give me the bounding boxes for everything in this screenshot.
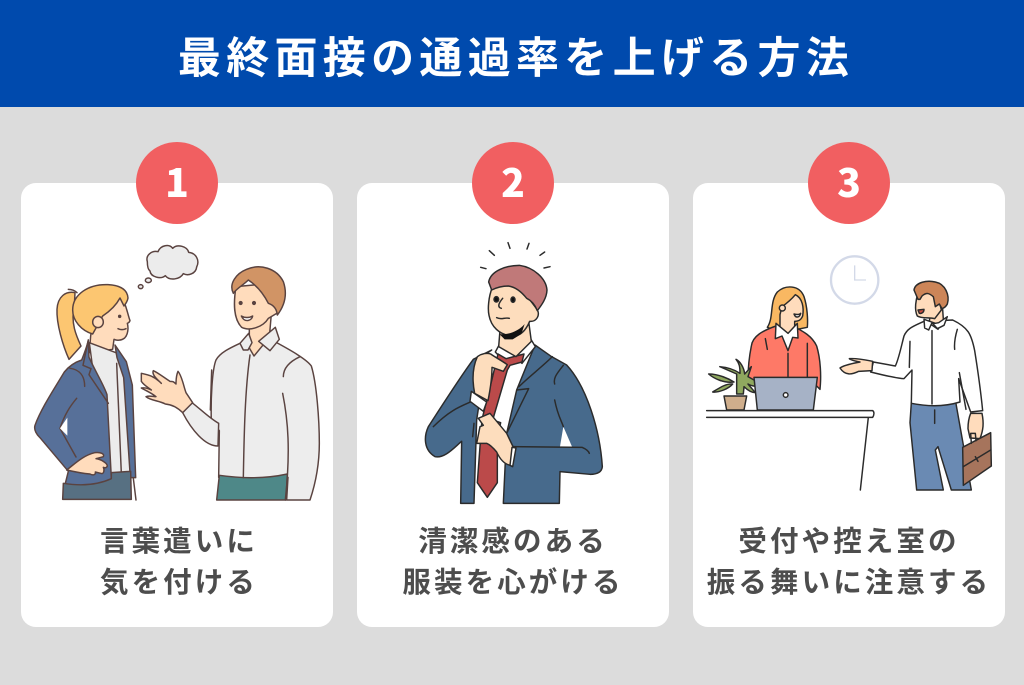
label 3: 受付や控え室の [738,526,960,558]
plant [709,359,765,410]
panel: step 1 [21,142,333,627]
laptop [754,377,817,410]
illustration: two people talking [35,246,319,500]
label 2: 服装を心がける [402,566,624,599]
label 1: 言葉遣いに [100,526,258,558]
visitor [840,281,991,490]
illustration: reception desk [707,256,991,490]
label 3: 振る舞いに注意する [707,567,991,599]
title: 最終面接の通過率を上げる方法 [178,35,854,83]
man [141,267,319,500]
number badge 1: 1 [165,153,189,209]
thought bubble [138,246,198,289]
label 2 [402,526,624,599]
header band [0,0,1024,107]
reception desk [707,411,874,490]
receptionist [748,287,821,389]
number badge 2: 2 [501,153,525,209]
wall clock [831,256,878,304]
label 1 [100,526,258,599]
panel: step 3 [693,142,1005,627]
number badge 3: 3 [837,153,861,209]
label 3 [707,526,991,599]
illustration: man adjusting tie [425,243,602,503]
woman [35,285,136,500]
label 1: 気を付ける [100,567,258,599]
number badge 2 [472,142,554,224]
number badge 3 [808,142,890,224]
panel: step 2 [357,142,669,627]
number badge 1 [136,142,218,224]
label 2: 清潔感のある [418,526,608,558]
emphasis lines [481,243,550,269]
